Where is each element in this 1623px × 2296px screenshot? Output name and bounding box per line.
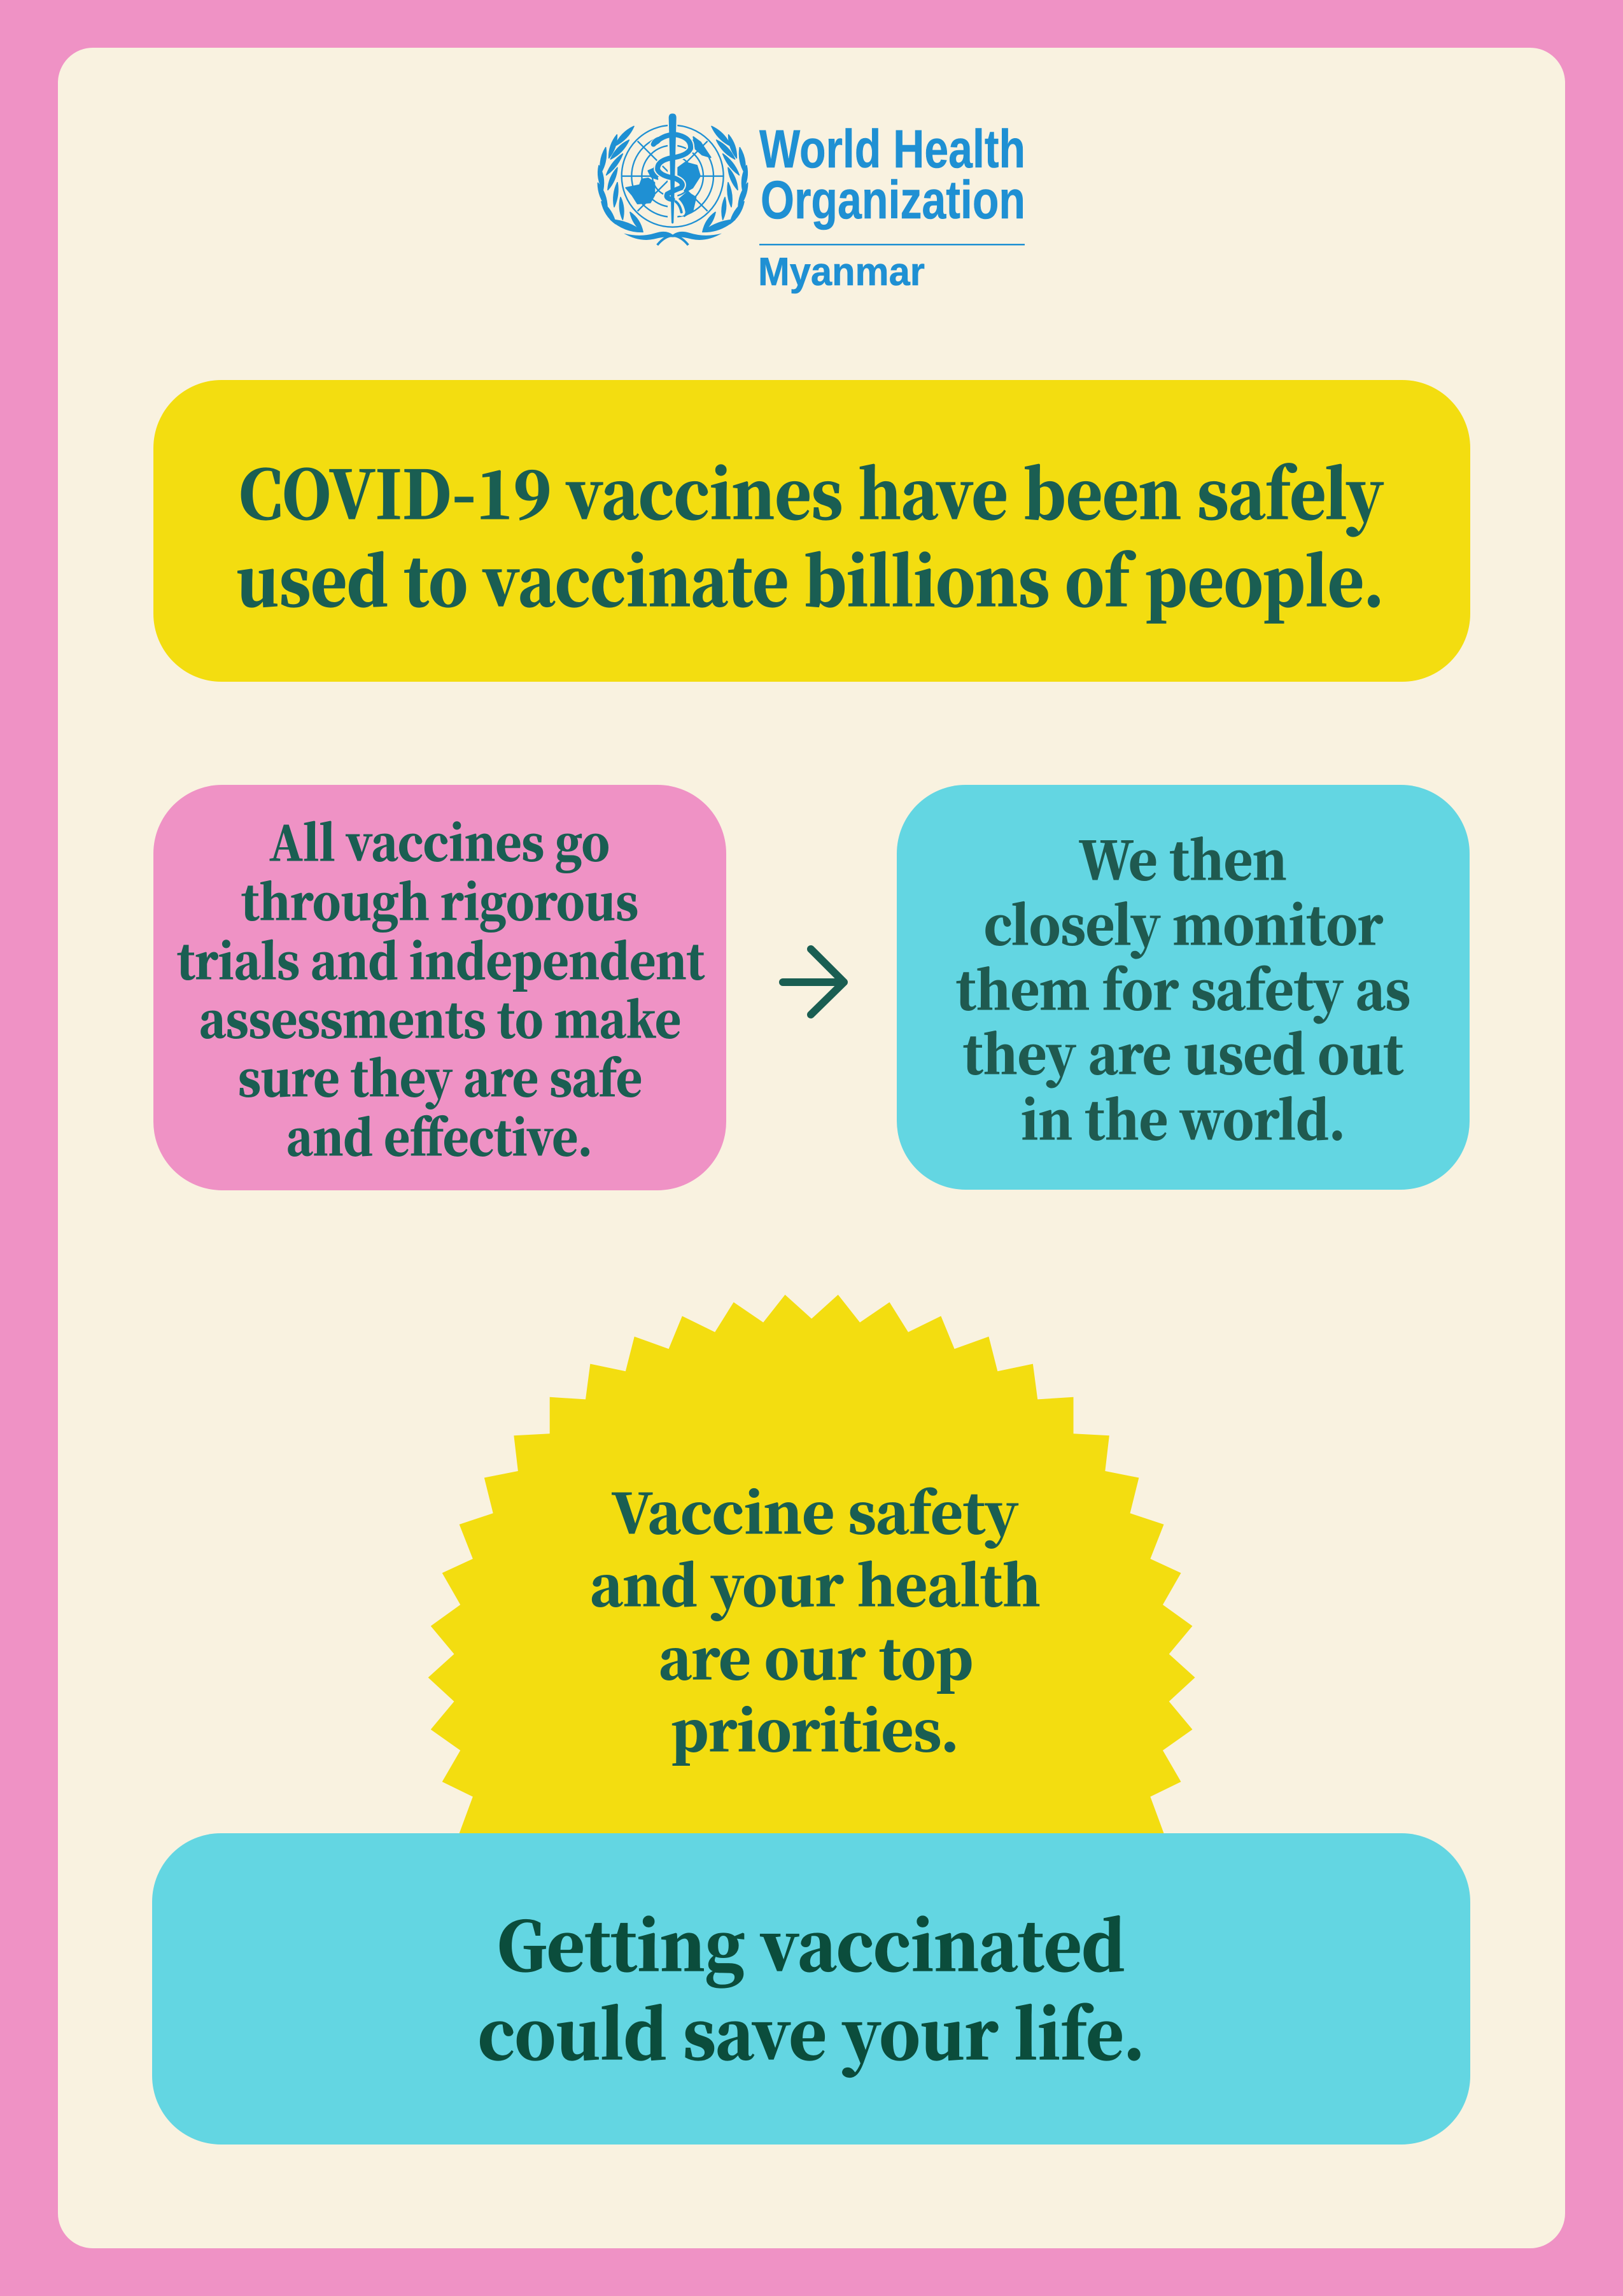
WHO Myanmar logo [598, 113, 1025, 294]
text: monitoring for safety: We then [1079, 821, 1287, 895]
panel: call to action [152, 1833, 1470, 2145]
logo wordmark: World Health Organization [759, 119, 1025, 230]
text: top priorities: priorities. [671, 1688, 959, 1767]
text: trials and assessments: assessments to make [199, 983, 681, 1052]
text: top priorities: Vaccine safety [612, 1470, 1019, 1549]
text: trials and assessments: and effective. [286, 1101, 593, 1169]
text: monitoring for safety: in the world. [1021, 1080, 1345, 1155]
arrow: from trials to monitoring [783, 949, 844, 1015]
heading: vaccines used on billions [236, 442, 1384, 625]
text: trials and assessments: through rigorous [241, 866, 638, 934]
text: top priorities: are our top [659, 1616, 973, 1695]
logo label: Myanmar: Myanmar [758, 250, 925, 294]
heading: could save your life: Getting vaccinated [497, 1894, 1125, 1990]
text: monitoring for safety: they are used out [963, 1015, 1404, 1089]
text: monitoring for safety: closely monitor [984, 885, 1383, 960]
text: trials and assessments [177, 806, 705, 1169]
starburst badge [428, 1295, 1195, 1833]
heading: could save your life [478, 1894, 1145, 2079]
heading: vaccines used on billions: used to vaccinate billions of people. [236, 530, 1384, 625]
panel: safety monitoring [897, 785, 1470, 1190]
text: trials and assessments: trials and independent [177, 925, 705, 993]
heading: vaccines used on billions: COVID-19 vaccines have been safely [239, 442, 1384, 538]
text: monitoring for safety: them for safety as [956, 950, 1410, 1025]
text: trials and assessments: sure they are safe [238, 1042, 642, 1110]
panel: rigorous trials [153, 785, 726, 1190]
text: top priorities: and your health [590, 1543, 1041, 1622]
panel: headline [153, 380, 1470, 682]
text: top priorities [590, 1470, 1041, 1767]
logo wordmark: World Health Organization: Organization [761, 170, 1025, 230]
icon: WHO emblem [598, 113, 748, 245]
text: monitoring for safety [956, 821, 1410, 1155]
text: trials and assessments: All vaccines go [269, 806, 610, 875]
heading: could save your life: could save your life. [478, 1983, 1145, 2079]
logo wordmark: World Health Organization: World Health [759, 119, 1025, 179]
